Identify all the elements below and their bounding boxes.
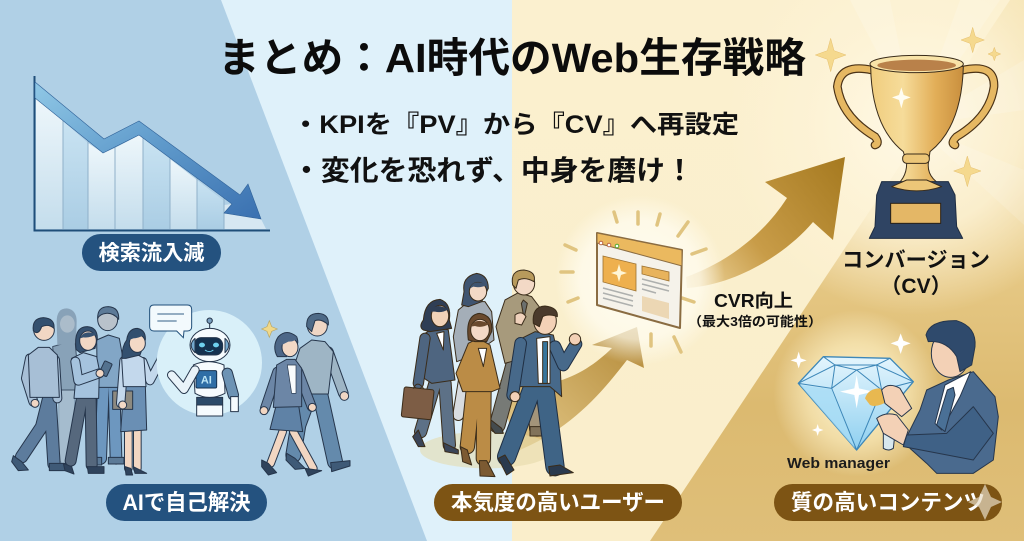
trophy base — [869, 182, 963, 238]
background: blue left wedge — [0, 0, 427, 541]
background: trophy glow rays — [725, 0, 1024, 315]
woman in tan suit — [456, 313, 500, 477]
woman with briefcase — [401, 299, 458, 454]
diamond — [798, 357, 913, 450]
chart falling arrow — [35, 82, 261, 219]
label: CV: （CV） — [880, 275, 952, 298]
title: まとめ：AI時代のWeb生存戦略 — [218, 35, 806, 81]
illustration: people solving with AI — [12, 305, 350, 476]
arrow: users to page — [500, 327, 644, 452]
woman with phone — [63, 327, 112, 474]
rays — [561, 212, 706, 352]
background: light blue centre band — [0, 0, 512, 541]
walking man — [286, 313, 350, 472]
cloth and spray bottle — [865, 388, 895, 450]
sparkles — [791, 333, 911, 436]
robot — [172, 318, 238, 416]
ground shadow — [420, 432, 553, 468]
label: quality content: 質の高いコンテンツ — [791, 490, 985, 515]
leading man — [498, 306, 581, 476]
chart: falling search traffic — [34, 76, 270, 230]
bullet: polish content: ・変化を恐れず、中身を磨け！ — [292, 155, 694, 186]
browser window — [597, 233, 682, 328]
sparkle — [262, 321, 277, 337]
illustration: trophy — [815, 27, 1001, 238]
manager — [877, 321, 998, 473]
label: motivated users: 本気度の高いユーザー — [451, 490, 665, 515]
trophy cup — [871, 59, 963, 188]
arrow: page to trophy — [686, 157, 845, 288]
label: quality content — [774, 484, 1002, 521]
cup collar — [903, 154, 929, 163]
label: search traffic down: 検索流入減 — [98, 241, 204, 265]
illustration: polishing diamond — [773, 310, 998, 477]
label: motivated users — [434, 484, 682, 521]
walking woman — [260, 332, 322, 476]
trophy handles — [837, 69, 994, 145]
watermark star — [968, 484, 1002, 520]
woman with folder — [113, 328, 166, 475]
bullet: KPI reset: ・KPIを『PV』から『CV』へ再設定 — [292, 111, 739, 139]
man in sweater — [12, 318, 66, 471]
back man — [95, 307, 124, 465]
label: CVR up: CVR向上 — [714, 291, 793, 311]
robot glow circle — [157, 310, 262, 415]
back man — [489, 270, 544, 436]
label: conversion: コンバージョン — [842, 249, 990, 272]
cup foot — [892, 180, 942, 191]
cup rim — [870, 55, 963, 73]
background: cream right band — [512, 0, 1024, 541]
label: search traffic down — [82, 234, 221, 271]
label: web manager: Web manager — [787, 456, 890, 472]
label: AI self-solve: AIで自己解決 — [122, 490, 250, 515]
speech bubble — [150, 305, 192, 338]
background: gold right wedge — [650, 0, 1024, 541]
base plate — [891, 203, 941, 223]
sparkles — [815, 27, 1001, 187]
label: AI self-solve — [106, 484, 267, 521]
illustration: web page with rays — [555, 195, 725, 365]
diamond glow — [773, 310, 940, 477]
label: up to 3x: （最大3倍の可能性） — [688, 314, 822, 329]
illustration: motivated users group — [401, 270, 581, 477]
robot: AI — [201, 374, 212, 386]
back woman — [453, 273, 494, 415]
cup sparkle — [892, 87, 911, 108]
back woman faded — [53, 308, 79, 457]
chart axes — [34, 76, 270, 230]
